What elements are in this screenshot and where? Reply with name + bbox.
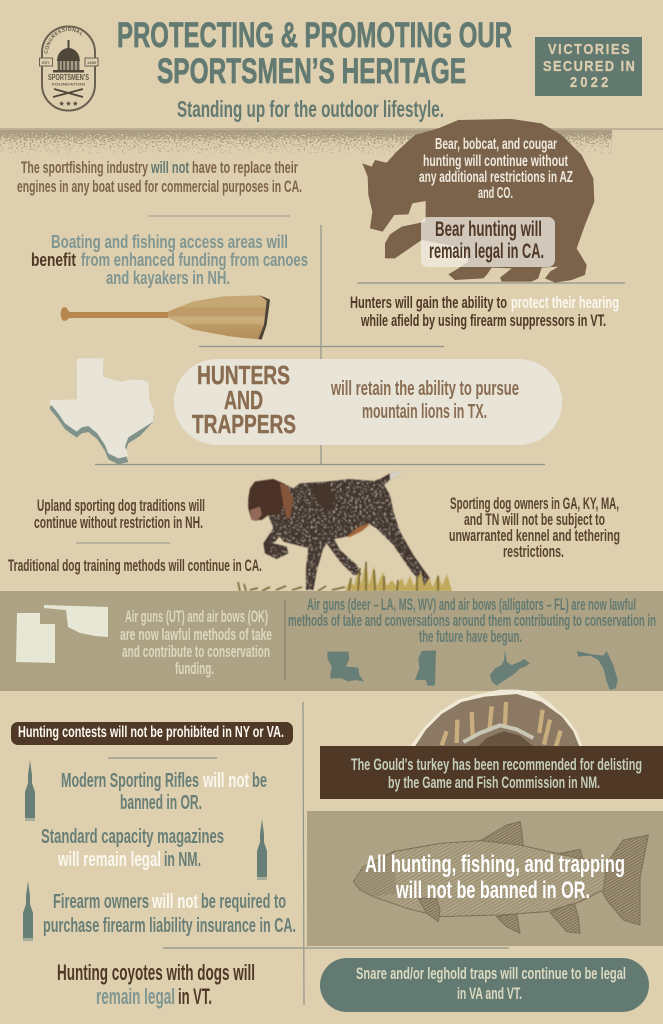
text: air guns UT, air bows OK: are now lawful methods of take	[120, 626, 272, 644]
icon: Texas	[50, 358, 154, 464]
callout: snare and leghold traps	[320, 958, 649, 1012]
icon: West Virginia	[490, 650, 530, 686]
text: traditional dog training: Traditional dog training methods will continue in CA.	[8, 557, 262, 575]
panel: hunters and trappers pill: mountain lions in TX.	[362, 401, 487, 423]
grass	[345, 561, 452, 591]
callout: bear hunting legal in CA: Bear hunting will	[435, 218, 542, 241]
text: bear, bobcat, cougar	[419, 136, 573, 202]
text: upland sporting dog traditions: continue without restriction in NH.	[34, 514, 203, 532]
callout: bear hunting legal in CA: remain legal in CA.	[429, 240, 544, 263]
logo: Congressional Sportsmen's Foundation: ★★★	[59, 100, 79, 108]
callout: snare and leghold traps: in VA and VT.	[457, 984, 522, 1003]
icon: Utah	[16, 613, 55, 663]
badge: victories secured in 2022: 2022	[570, 73, 608, 90]
logo: Congressional Sportsmen's Foundation	[39, 26, 98, 112]
logo: Congressional Sportsmen's Foundation: FOUNDATION	[52, 82, 85, 86]
image: pointing dog in grass	[238, 471, 452, 591]
panel: hunters and trappers pill: will retain the ability to pursue	[330, 378, 519, 400]
text: hunting coyotes with dogs: in VT.	[178, 984, 212, 1009]
text: bear, bobcat, cougar: any additional restrictions in AZ	[419, 169, 573, 186]
text: boating and fishing access: benefit	[31, 250, 76, 270]
callout: hunting contests	[11, 722, 293, 745]
text: boating and fishing access: Boating and fishing access areas will	[51, 232, 288, 252]
text: air guns deer, air bows alligators: the future have begun.	[419, 628, 522, 646]
icon: Oklahoma	[44, 605, 108, 637]
text: modern sporting rifles: Modern Sporting Rifles	[61, 770, 199, 792]
dog head and saddle	[248, 471, 401, 537]
image: trout engraving	[353, 822, 648, 933]
icon: Louisiana	[327, 652, 364, 682]
icon: paddle	[61, 295, 270, 340]
badge: victories secured in 2022	[535, 37, 642, 96]
divider lines and vertical axis upper	[76, 216, 625, 543]
text: modern sporting rifles: be	[252, 770, 267, 792]
text: upland sporting dog traditions: Upland sporting dog traditions will	[37, 497, 205, 515]
text: hearing protection: Hunters will gain the ability to	[350, 293, 507, 312]
panel: air guns and air bows band	[0, 591, 663, 691]
text: bear, bobcat, cougar: hunting will continue without	[423, 153, 568, 170]
text: sportfishing engines: The sportfishing industry	[21, 158, 148, 177]
text: air guns UT, air bows OK: and contribute to conservation	[122, 643, 270, 661]
text: air guns UT, air bows OK	[120, 608, 272, 678]
icon: bullet 2	[257, 819, 267, 880]
text: bear, bobcat, cougar: and CO.	[478, 185, 513, 202]
text: sporting dog owners: restrictions.	[503, 543, 564, 561]
text: sportfishing engines: have to replace their	[192, 158, 298, 177]
text: air guns UT, air bows OK: funding.	[175, 660, 214, 678]
icon: Florida	[577, 651, 618, 690]
panel: all hunting, fishing and trapping	[307, 811, 663, 946]
icon: bullet 1	[25, 760, 35, 821]
text: air guns UT, air bows OK: Air guns (UT) and air bows (OK)	[125, 608, 268, 626]
text: sportfishing engines: will not	[150, 158, 189, 177]
title: SPORTSMEN’S HERITAGE	[157, 52, 466, 91]
title	[117, 16, 512, 91]
logo: Congressional Sportsmen's Foundation: SPORTSMEN’S	[48, 73, 89, 82]
text: air guns deer, air bows alligators	[288, 596, 656, 646]
panel: hunters and trappers pill: HUNTERS	[197, 360, 290, 390]
text: bear, bobcat, cougar: Bear, bobcat, and cougar	[435, 136, 557, 153]
icon: bear silhouette	[362, 119, 594, 283]
rough speckled divider band	[0, 128, 663, 154]
text: standard capacity magazines: Standard capacity magazines	[41, 826, 224, 848]
text: boating and fishing access: from enhanced funding from canoes	[81, 250, 308, 270]
text: firearm liability insurance: be required to	[201, 891, 286, 913]
callout: hunting contests: Hunting contests will not be prohibited in NY or VA.	[18, 724, 284, 741]
subtitle: Standing up for the outdoor lifestyle.	[177, 96, 444, 122]
panel: hunters and trappers pill	[174, 359, 562, 445]
icon: bullet 3	[23, 881, 33, 941]
text: firearm liability insurance: purchase firearm liability insurance in CA.	[43, 915, 296, 937]
text: boating and fishing access: and kayakers in NH.	[106, 268, 230, 288]
text: hunting coyotes with dogs: remain legal	[96, 984, 175, 1009]
text: standard capacity magazines: will remain legal	[57, 849, 161, 871]
text: firearm liability insurance: will not	[151, 891, 198, 913]
text: sportfishing engines: engines in any boat used for commercial purposes in CA.	[17, 177, 302, 196]
panel: hunters and trappers pill: TRAPPERS	[192, 409, 296, 439]
divider lines lower	[108, 702, 509, 1005]
text: upland sporting dog traditions	[34, 497, 205, 532]
icon: Mississippi	[415, 650, 436, 686]
text: hunting coyotes with dogs: Hunting coyotes with dogs will	[57, 960, 255, 985]
text: sporting dog owners	[449, 495, 620, 561]
text: firearm liability insurance: Firearm owners	[53, 891, 149, 913]
text: modern sporting rifles: banned in OR.	[120, 792, 202, 814]
panel: hunters and trappers pill: AND	[224, 385, 263, 415]
badge: victories secured in 2022: VICTORIES	[548, 40, 630, 57]
logo: Congressional Sportsmen's Foundation: CONGRESSIONAL	[44, 28, 82, 54]
text: modern sporting rifles: will not	[202, 770, 249, 792]
image: turkey tail fan	[410, 690, 583, 746]
badge: victories secured in 2022: SECURED IN	[543, 57, 635, 74]
callout: bear hunting legal in CA	[421, 217, 555, 267]
text: standard capacity magazines: in NM.	[164, 849, 201, 871]
logo: Congressional Sportsmen's Foundation: 1989	[87, 60, 97, 65]
panel: Gould's turkey	[320, 746, 663, 799]
logo: Congressional Sportsmen's Foundation: EST.	[42, 60, 50, 65]
